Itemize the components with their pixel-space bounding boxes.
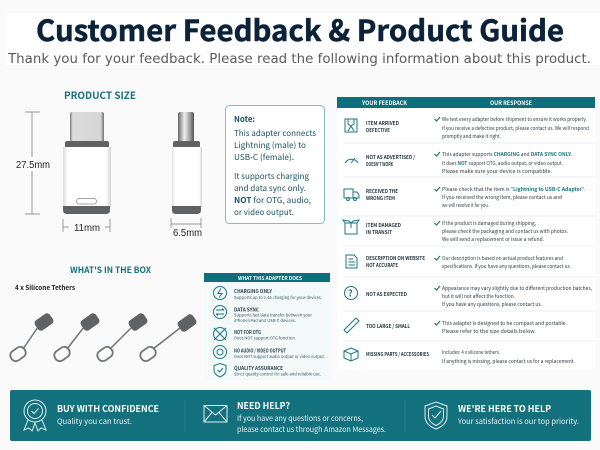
row: charging only: Supports up to 2.4A charging for your devices. — [234, 295, 322, 301]
tethers caption: 4 x Silicone Tethers — [15, 282, 75, 292]
row: missing parts / accessories: MISSING PARTS / ACCESSORIES — [366, 351, 429, 358]
footer: we're here to help: WE'RE HERE TO HELP — [458, 402, 551, 415]
row: not as expected: but it will not affect the function. — [442, 293, 516, 300]
row: description not accurate: DESCRIPTION ON WEBSITE — [366, 255, 425, 262]
note box: Note: — [234, 113, 255, 125]
row: item arrived defective — [345, 116, 589, 140]
note box — [226, 106, 324, 224]
tether 4 — [138, 313, 198, 363]
row: data sync: DATA SYNC — [234, 306, 259, 314]
row: missing parts / accessories: If anything is missing, please contact us for a replacement. — [442, 358, 576, 365]
tether 2 — [52, 312, 101, 363]
row: too large / small — [344, 318, 568, 335]
row: not as expected: If you have any questions, please contact us. — [442, 301, 543, 308]
note box: or video output. — [234, 206, 294, 218]
row: too large / small: This adapter is designed to be compact and portable. — [442, 320, 568, 327]
row: received the wrong item: we will resolve it for you. — [442, 202, 489, 209]
row: not as advertised: DOESN'T WORK — [366, 161, 393, 168]
adapter side view — [172, 112, 202, 214]
panel: what's in the box — [8, 264, 198, 363]
row: received the wrong item: Please check that the item is " Lightning to USB-C Adapter ". — [442, 186, 586, 193]
row: no audio / video output — [214, 346, 325, 360]
table header: YOUR FEEDBACK — [361, 99, 407, 107]
footer: buy with confidence — [24, 400, 159, 431]
row: item damaged in transit — [343, 220, 569, 243]
icon: envelope — [204, 406, 227, 422]
row: received the wrong item: WRONG ITEM — [366, 195, 395, 202]
row: not for otg — [214, 328, 296, 342]
row: quality assurance: QUALITY ASSURANCE — [234, 365, 283, 372]
title: Customer Feedback & Product Guide — [36, 8, 564, 50]
row: not as advertised: This adapter supports CHARGING and DATA SYNC ONLY. — [442, 151, 572, 158]
panel: what this adapter does — [204, 273, 330, 380]
row: not as expected: Appearance may vary slightly due to different production batches, — [442, 285, 593, 292]
note box: and data sync only. — [234, 182, 306, 194]
row: no audio / video output: Does NOT support audio output or video output. — [234, 354, 325, 360]
row: item damaged in transit: If the product is damaged during shipping, — [442, 220, 537, 227]
footer: buy with confidence: Quality you can trust. — [57, 416, 132, 427]
row: not as advertised — [345, 151, 572, 175]
width dimension — [63, 219, 110, 234]
row: not as advertised: Please make sure your device is compatible. — [442, 168, 553, 175]
panel: product size — [14, 87, 202, 239]
row: not as advertised: It does NOT support OTG, audio output, or video output. — [442, 160, 564, 167]
row: item damaged in transit: ITEM DAMAGED — [366, 222, 401, 229]
row: received the wrong item: RECEIVED THE — [366, 188, 398, 195]
footer: need help: NEED HELP? — [237, 399, 290, 412]
row: item damaged in transit: please check the packaging and contact us with photos. — [442, 228, 569, 235]
panel header: WHAT THIS ADAPTER DOES — [238, 275, 302, 282]
footer banner — [10, 390, 591, 441]
note box: Lightning (male) to — [234, 139, 306, 151]
row: data sync — [214, 306, 313, 324]
footer: need help: please contact us through Amazon Messages. — [237, 424, 386, 435]
depth dimension — [171, 218, 202, 239]
row: no audio / video output: NO AUDIO / VIDEO OUTPUT — [234, 348, 286, 354]
row: quality assurance — [214, 364, 321, 378]
icon: award ribbon — [24, 400, 46, 431]
row: item arrived defective: We test every adapter before shipment to ensure it works properly. — [442, 116, 588, 123]
note box: It supports charging — [234, 170, 309, 182]
footer: we're here to help: Your satisfaction is our top priority. — [457, 416, 579, 427]
note box: USB-C (female). — [234, 151, 294, 163]
footer: need help — [204, 399, 386, 435]
row: description not accurate: specifications. If you have any questions, please contact us. — [442, 263, 572, 270]
row: item damaged in transit: We will send a replacement or issue a refund. — [442, 236, 545, 243]
table header — [337, 97, 595, 108]
row: missing parts / accessories: Includes: 4 x silicone tethers. — [442, 349, 501, 356]
row: data sync: iPhone/iPad and USB-C devices. — [234, 318, 296, 324]
table header: OUR RESPONSE — [490, 99, 533, 107]
note box: This adapter connects — [234, 127, 316, 139]
row: missing parts / accessories — [344, 348, 576, 365]
heading: what's in the box: WHAT'S IN THE BOX — [70, 264, 152, 276]
row: description not accurate — [346, 255, 572, 270]
footer: we're here to help — [425, 402, 579, 429]
row: received the wrong item — [344, 186, 586, 209]
depth dimension: 6.5mm — [173, 228, 202, 239]
row: not for otg: NOT FOR OTG — [234, 329, 261, 336]
heading: product size: PRODUCT SIZE — [64, 87, 136, 102]
row: description not accurate: NOT ACCURATE — [366, 262, 398, 269]
footer: need help: If you have any questions or concerns, — [237, 413, 363, 424]
height dimension: 27.5mm — [16, 160, 50, 171]
row: not as advertised: NOT AS ADVERTISED / — [366, 154, 415, 161]
row: not as expected — [344, 285, 593, 308]
height dimension — [14, 112, 52, 214]
tether 1 — [8, 312, 55, 363]
row: charging only: CHARGING ONLY — [234, 288, 272, 295]
row: description not accurate: Our description is based on actual product features and — [442, 255, 563, 262]
icon: shield — [425, 402, 447, 429]
row: item arrived defective: DEFECTIVE — [366, 127, 390, 134]
row: item arrived defective: ITEM ARRIVED — [366, 120, 399, 127]
row: too large / small: TOO LARGE / SMALL — [366, 323, 410, 330]
row: not as expected: NOT AS EXPECTED — [366, 291, 407, 298]
row: quality assurance: Strict quality control for safe and reliable use. — [234, 372, 321, 378]
row: item damaged in transit: IN TRANSIT — [366, 229, 392, 236]
tether 3 — [95, 312, 149, 363]
row: not as expected: ? — [348, 286, 353, 300]
row: too large / small: Please refer to the size details below. — [442, 328, 537, 335]
row: received the wrong item: If you received the wrong item, please contact us and — [442, 194, 562, 201]
row: not for otg: Does NOT support OTG function. — [234, 336, 296, 342]
panel: feedback table — [337, 97, 595, 370]
row: item arrived defective: promptly and make it right. — [442, 133, 502, 140]
subtitle: Thank you for your feedback. Please read the following information about this product. — [7, 51, 591, 67]
row: item arrived defective: If you receive a defective product, please contact us. We will respond — [442, 125, 589, 132]
adapter front view — [63, 112, 111, 214]
note box: NOT for OTG, audio, — [234, 194, 311, 206]
row: charging only — [214, 286, 322, 301]
width dimension: 11mm — [74, 223, 100, 234]
row: data sync: Supports fast data transfer between your — [234, 312, 313, 318]
footer: buy with confidence: BUY WITH CONFIDENCE — [57, 402, 159, 415]
